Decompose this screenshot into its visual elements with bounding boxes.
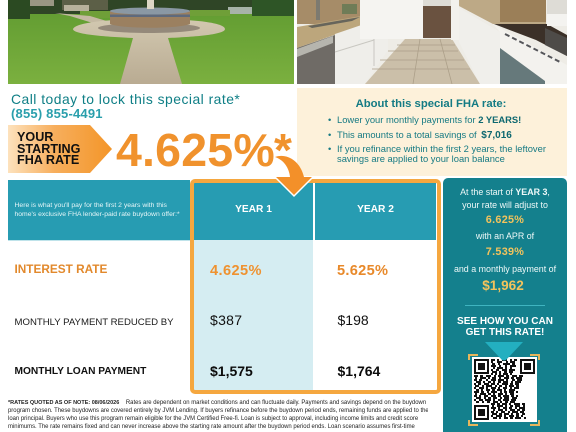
- row label: interest rate: INTEREST RATE: [14, 262, 107, 276]
- bullet list: Lower your monthly payments for 2 YEARS!: [337, 114, 521, 125]
- year 2 header: [315, 183, 436, 240]
- APR value: 7.539%: [486, 246, 524, 258]
- row label: monthly loan payment: MONTHLY LOAN PAYMENT: [14, 366, 146, 377]
- year 1 header: YEAR 1: [235, 204, 272, 215]
- footnote: rate disclaimer: [8, 400, 428, 430]
- year 1 column: [194, 183, 313, 391]
- bullet list: If you refinance within the first 2 years, the leftover: [337, 143, 546, 154]
- call to action: see how you can get this rate: [457, 316, 553, 338]
- value: year 2 loan payment: $1,764: [338, 363, 380, 379]
- value: year 1 interest rate: 4.625%: [210, 263, 262, 279]
- arrow: rate to year 1: [275, 156, 312, 197]
- arrow label: your starting FHA rate: YOUR: [17, 130, 53, 144]
- year 2 column: [315, 183, 436, 391]
- year 2 header: YEAR 2: [357, 204, 394, 215]
- arrow label: your starting FHA rate: FHA RATE: [17, 153, 79, 167]
- year 3 intro: At the start of YEAR 3,: [460, 186, 550, 196]
- monthly payment value: $1,962: [482, 278, 524, 292]
- about heading: About this special FHA rate:: [356, 98, 506, 110]
- bullet list: •: [328, 143, 331, 154]
- footnote: rate disclaimer: loan principal. Buyers who use this program remain eligible for the JVM Certified Free-fi. Loan is subject to approval, including income limits and credit score: [8, 416, 418, 422]
- heading: call today: Call today to lock this special rate*: [11, 91, 240, 107]
- footnote: rate disclaimer: *RATES QUOTED AS OF NOTE: 08/06/2026 Rates are dependent on market conditions and can fluctuate daily. Payments and savings depend on the buydown: [8, 400, 426, 406]
- divider line: [465, 305, 545, 306]
- value: year 1 reduction: $387: [210, 312, 242, 328]
- row label: monthly payment reduced by: MONTHLY PAYMENT REDUCED BY: [14, 316, 174, 328]
- panel: year 3 adjustment: [443, 178, 567, 432]
- bullet list: •: [328, 129, 331, 140]
- asterisk: *: [274, 124, 292, 176]
- photo: kitchen: [297, 0, 567, 84]
- APR label: with an APR of: [476, 231, 534, 241]
- footnote: rate disclaimer: minimums. The rate remains fixed and can never increase above the starting rate amount after the buydown period ends. Loan scenario assumes first-time: [8, 424, 415, 430]
- bullet list: [328, 114, 546, 164]
- adjusted rate: 6.625%: [486, 214, 524, 226]
- call to action: see how you can get this rate: SEE HOW YOU CAN: [457, 316, 553, 327]
- QR code: [468, 342, 540, 426]
- monthly payment label: and a monthly payment of: [454, 264, 556, 274]
- bullet list: This amounts to a total savings of $7,016: [337, 129, 512, 141]
- table header left: intro text: home's exclusive FHA lender-paid rate buydown offer:*: [14, 210, 180, 218]
- panel: about this rate: [297, 88, 567, 176]
- arrow label: your starting FHA rate: [8, 125, 112, 173]
- year 3 intro: [460, 186, 550, 210]
- phone number: (855) 855-4491: [11, 106, 103, 121]
- year 1 header: [194, 183, 313, 240]
- bullet list: •: [328, 114, 331, 125]
- big rate 4.625%: 4.625%: [116, 124, 275, 176]
- bullet list: savings are applied to your loan balance: [337, 153, 505, 164]
- value: year 2 interest rate: 5.625%: [337, 263, 388, 279]
- footnote: rate disclaimer: program chosen. These buydowns are covered entirely by JVM Lending. If buyers refinance before the buydown period ends, remaining funds are applied to their: [8, 408, 428, 414]
- year 3 intro: your rate will adjust to: [462, 200, 548, 210]
- highlight frame around years: [190, 179, 441, 394]
- table header left: intro text: Here is what you'll pay for the first 2 years with this: [14, 202, 167, 209]
- arrow label: your starting FHA rate: STARTING: [17, 142, 80, 156]
- table header left: intro text: [8, 180, 190, 241]
- photo: garden fountain: [8, 0, 294, 84]
- value: year 1 loan payment: $1,575: [210, 363, 253, 379]
- call to action: see how you can get this rate: GET THIS RATE!: [466, 327, 544, 338]
- value: year 2 reduction: $198: [338, 312, 369, 328]
